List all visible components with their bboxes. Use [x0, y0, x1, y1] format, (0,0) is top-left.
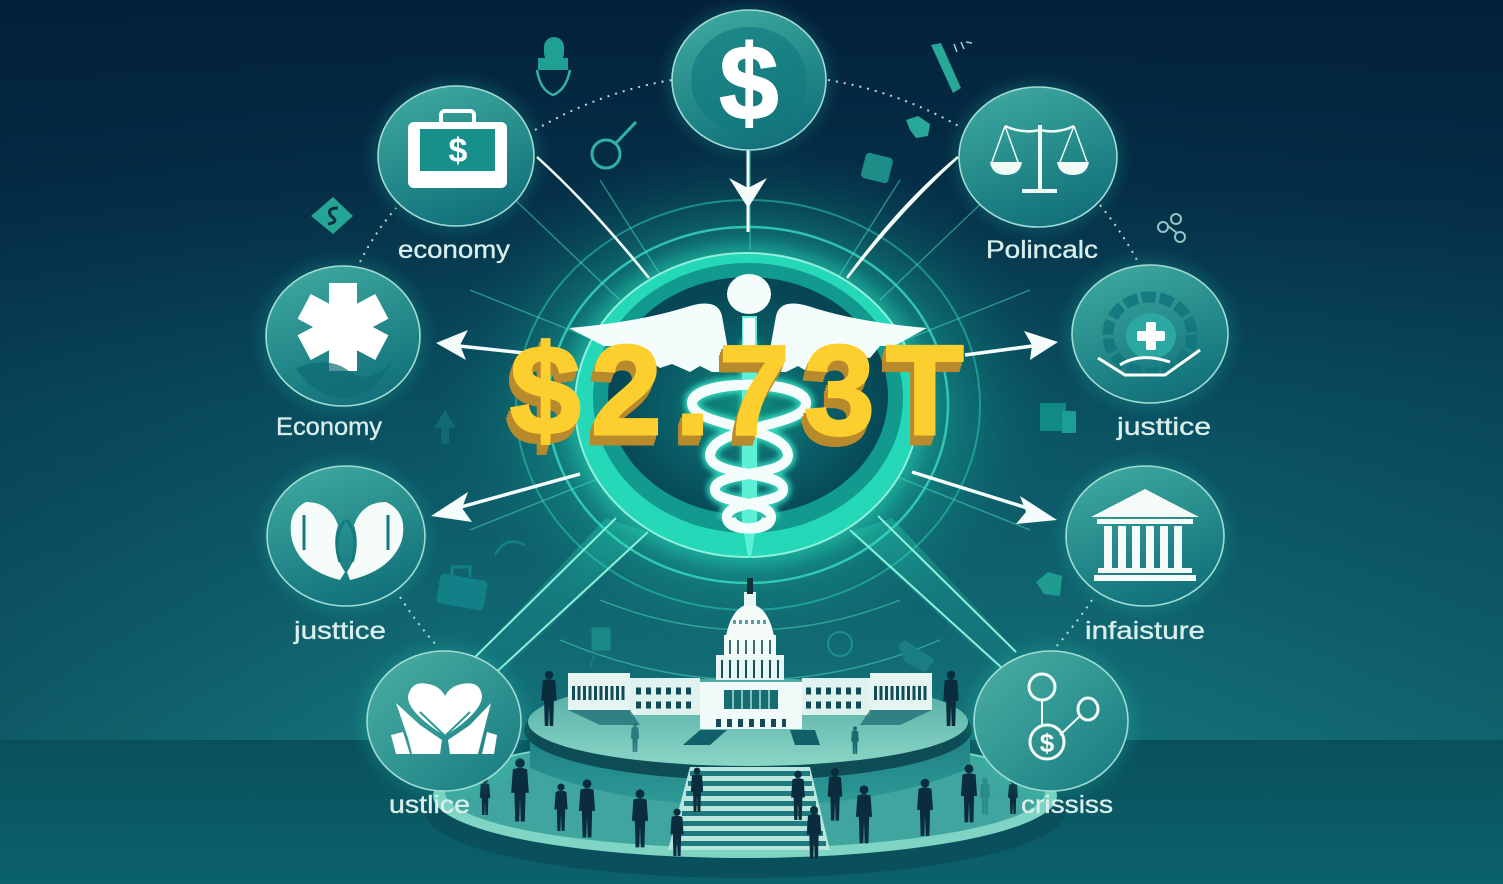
icon: blob: [1036, 572, 1062, 596]
arrows: [431, 150, 1058, 524]
icon: briefcase: [408, 111, 507, 188]
label: justtice right: justtice: [1116, 413, 1211, 441]
people: [480, 671, 1018, 859]
central pavilion: [700, 682, 802, 729]
headline value: $2.73T: [506, 329, 960, 471]
icon: bank: [1091, 489, 1199, 581]
arrow: right upper: [965, 331, 1058, 360]
icon: connected nodes: [1029, 674, 1098, 759]
node: care: [1066, 258, 1234, 410]
dome: [716, 578, 784, 680]
dotted connectors: [360, 80, 1138, 648]
serpents: [692, 385, 806, 528]
light beams to lower nodes: [468, 516, 1018, 680]
node: money: [667, 5, 831, 155]
lower platform: [425, 734, 1065, 878]
central emblem: [565, 245, 929, 565]
upper platform: [524, 678, 972, 806]
plaza paths: [683, 730, 727, 745]
node: economy briefcase: [372, 80, 540, 232]
label: infaisture: infaisture: [1085, 617, 1205, 645]
label: ustlice: ustlice: [389, 791, 470, 819]
icon: documents: [1040, 403, 1076, 433]
arrow: top: [729, 150, 767, 232]
headline value: $2.73T: [508, 323, 962, 465]
label: Economy: Economy: [276, 413, 383, 441]
node: cupped hands: [262, 460, 430, 612]
node: network: [967, 645, 1135, 797]
icon: apple: [828, 632, 852, 656]
icon: pen: [931, 42, 972, 93]
capitol building: [568, 578, 932, 745]
node: scales: [954, 81, 1122, 233]
inner ring: [593, 263, 903, 533]
staff top: [727, 274, 771, 314]
icon: puzzle: [906, 116, 930, 138]
icon: hand with cross: [1098, 297, 1200, 375]
icon: lock: [537, 37, 570, 95]
small decorative icons: [311, 37, 1185, 672]
node: institution: [1061, 460, 1229, 612]
label: Polincalc: Polincalc: [986, 236, 1098, 264]
icon: clip: [590, 628, 610, 668]
wings: [568, 673, 932, 725]
node: heart: [360, 645, 528, 797]
arrow: left lower: [431, 474, 580, 522]
platform with capitol: [425, 578, 1065, 878]
icon: molecule: [1158, 214, 1185, 242]
arrow: right lower: [912, 472, 1057, 524]
wing shading: [568, 710, 640, 725]
icon: scales of justice: [990, 125, 1089, 191]
staff: [742, 316, 757, 558]
inner dark disc: [608, 277, 888, 515]
icon: briefcase: $: [449, 132, 468, 170]
portico arches: [716, 719, 786, 727]
node: medical star: [259, 260, 427, 412]
icon: up arrow: [434, 410, 456, 444]
caduceus: [569, 274, 927, 558]
headline value: $2.73T: [507, 326, 961, 468]
icon: dollar: $: [720, 24, 778, 142]
label: crississ: crississ: [1021, 791, 1113, 819]
icon: hat: [495, 542, 525, 555]
outer ring: [565, 245, 929, 565]
curved link: economy: [537, 157, 649, 278]
icon: hands: [291, 502, 403, 580]
staircase: [668, 767, 830, 850]
label: justtice left: justtice: [293, 617, 386, 645]
curved link: political: [847, 157, 958, 278]
icon: heart in hands: [391, 683, 497, 754]
icon: tag: [898, 640, 935, 672]
icon: connected nodes: $: [1040, 728, 1055, 758]
icon: money tag: [311, 197, 353, 234]
headline value: $2.73T: [510, 319, 964, 461]
icon: bag: [436, 567, 488, 611]
icon: magnifier: [592, 122, 636, 168]
label: economy: economy: [398, 236, 511, 264]
icon: tile: [860, 152, 894, 184]
arrow: left upper: [436, 330, 552, 360]
icon: star of life: [298, 283, 388, 371]
central glow: [428, 140, 1068, 680]
wings: [569, 304, 732, 372]
